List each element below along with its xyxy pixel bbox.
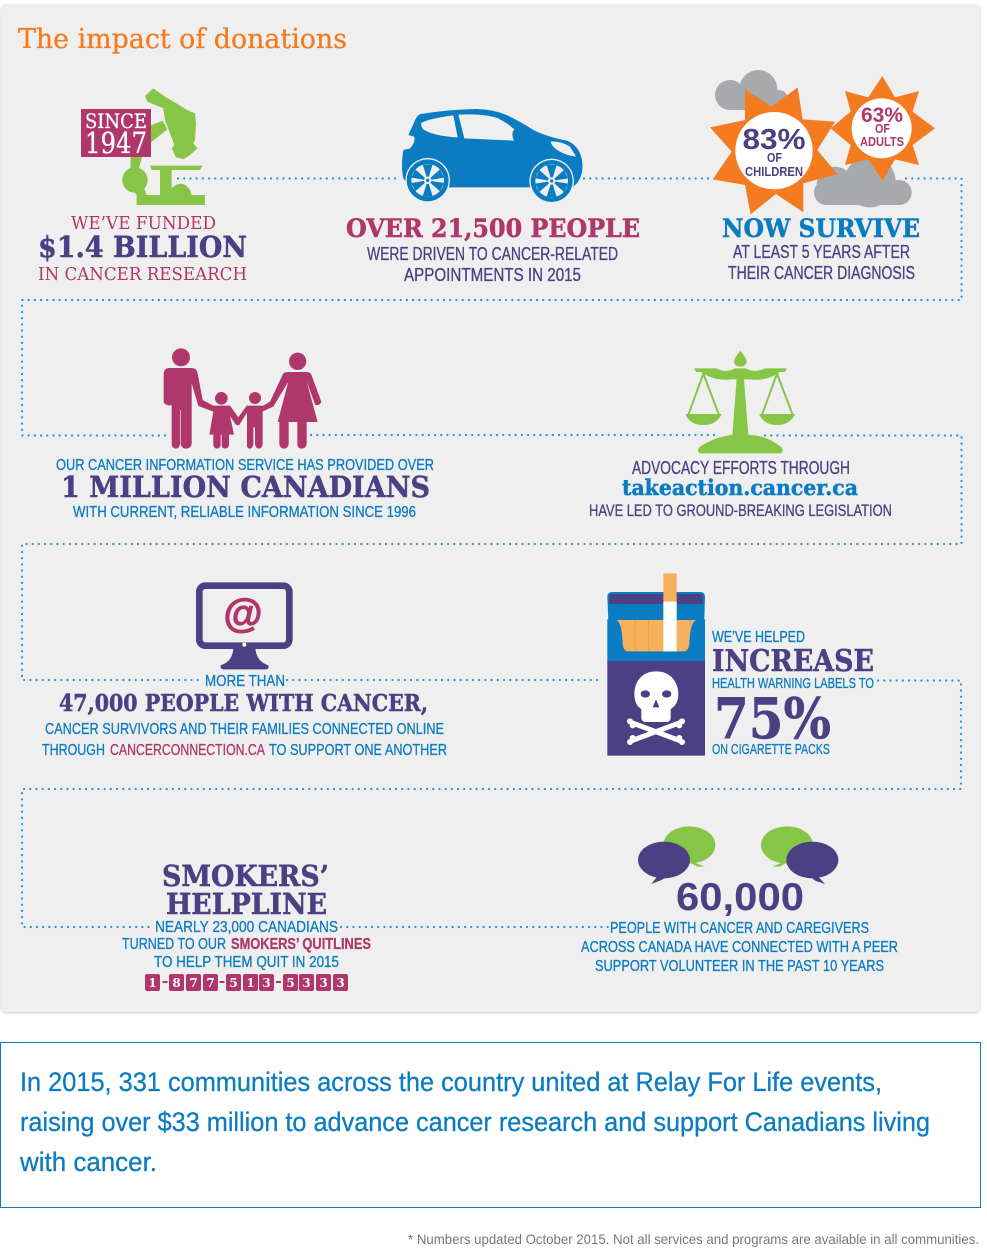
callout: Relay For Life	[0, 1042, 980, 1208]
text block: research funding: IN CANCER RESEARCH	[38, 264, 247, 285]
text block: peer support: SUPPORT VOLUNTEER IN THE PAST 10 YEARS	[595, 958, 884, 975]
text block: cancer connection: 47,000 PEOPLE WITH CANCER,	[59, 690, 428, 717]
icon: cigarette pack	[607, 573, 705, 756]
icon: clouds and suns	[710, 70, 935, 214]
text: 83% of children: CHILDREN	[745, 164, 803, 179]
text: 63% of adults: 63%	[861, 104, 903, 127]
text block: survival	[722, 214, 920, 283]
text block: warning labels: ON CIGARETTE PACKS	[712, 741, 830, 758]
text block: peer support: PEOPLE WITH CANCER AND CAREGIVERS	[610, 920, 869, 937]
text block: peer support	[581, 876, 898, 975]
text block: smokers' helpline: SMOKERS’ QUITLINES	[231, 936, 371, 953]
text block: survival: AT LEAST 5 YEARS AFTER	[733, 242, 910, 262]
text block: cancer connection: TO SUPPORT ONE ANOTHER	[269, 742, 447, 759]
text block: research funding	[38, 213, 247, 285]
phone number keys	[145, 974, 348, 991]
text block: cancer information service: 1 MILLION CANADIANS	[61, 470, 430, 504]
text block: smokers' helpline: SMOKERS’	[162, 859, 329, 893]
text block: advocacy: HAVE LED TO GROUND-BREAKING LEGISLATION	[589, 501, 892, 520]
panel: impact of donations	[1, 4, 980, 1012]
text block: warning labels	[712, 629, 874, 758]
text block: cancer information service: OUR CANCER INFORMATION SERVICE HAS PROVIDED OVER	[56, 457, 434, 474]
text block: peer support: 60,000	[676, 876, 804, 919]
callout: Relay For Life: with cancer.	[19, 1147, 157, 1177]
icon: microscope	[122, 88, 205, 205]
phone number keys: 3	[319, 976, 328, 990]
icon: computer monitor	[199, 586, 289, 669]
text block: rides	[346, 214, 640, 285]
phone number keys: 8	[172, 976, 181, 990]
icon: computer monitor: @	[223, 592, 262, 636]
text block: rides: OVER 21,500 PEOPLE	[346, 214, 640, 243]
text block: warning labels: HEALTH WARNING LABELS TO	[712, 675, 874, 692]
phone number keys: 1	[148, 976, 157, 990]
badge: since 1947	[81, 109, 151, 160]
text block: peer support: ACROSS CANADA HAVE CONNECTED WITH A PEER	[581, 939, 898, 956]
text block: cancer connection: CANCERCONNECTION.CA	[110, 742, 265, 759]
text block: warning labels: 75%	[714, 686, 831, 752]
text: 83% of children: OF	[767, 150, 782, 165]
icon: car	[402, 109, 583, 203]
text: 83% of children	[742, 124, 806, 179]
text block: warning labels: WE’VE HELPED	[712, 629, 805, 646]
phone number keys: 5	[286, 976, 295, 990]
callout: Relay For Life: raising over $33 million to advance cancer research and support Canadians living	[20, 1107, 930, 1137]
text block: survival: THEIR CANCER DIAGNOSIS	[728, 263, 915, 283]
text block: cancer connection: CANCER SURVIVORS AND THEIR FAMILIES CONNECTED ONLINE	[45, 721, 444, 738]
phone number keys: 3	[262, 976, 271, 990]
text block: cancer connection: THROUGH	[42, 742, 105, 759]
badge: since 1947: SINCE	[85, 109, 147, 133]
text block: smokers' helpline: HELPLINE	[166, 887, 327, 921]
text: 63% of adults: OF	[875, 121, 890, 136]
phone number keys: 5	[229, 976, 238, 990]
callout: Relay For Life: In 2015, 331 communities across the country united at Relay For Life events,	[20, 1067, 882, 1097]
title: The impact of donations	[18, 24, 347, 55]
text block: survival: NOW SURVIVE	[722, 214, 920, 243]
badge: since 1947: 1947	[85, 126, 147, 160]
text: 83% of children: 83%	[742, 124, 806, 156]
text block: smokers' helpline: TO HELP THEM QUIT IN 2015	[154, 954, 339, 971]
icon: scales	[685, 351, 795, 453]
connector: dotted path	[22, 178, 962, 927]
text block: advocacy	[589, 458, 892, 520]
text block: cancer information service	[56, 457, 434, 521]
phone number keys: 7	[189, 976, 198, 990]
text block: cancer connection	[42, 673, 447, 759]
icon: speech bubbles	[638, 826, 838, 884]
text block: advocacy: takeaction.cancer.ca	[622, 475, 858, 500]
phone number keys: 3	[336, 976, 345, 990]
phone number keys: 1	[246, 976, 255, 990]
text block: cancer information service: WITH CURRENT, RELIABLE INFORMATION SINCE 1996	[73, 504, 416, 521]
text block: research funding: WE’VE FUNDED	[71, 213, 216, 234]
phone number keys: 3	[302, 976, 311, 990]
phone number keys: 7	[206, 976, 215, 990]
text block: smokers' helpline: TURNED TO OUR	[122, 936, 226, 953]
text: 63% of adults	[860, 104, 904, 149]
text block: warning labels: INCREASE	[712, 644, 874, 679]
icon: family	[164, 348, 321, 449]
text block: rides: APPOINTMENTS IN 2015	[404, 265, 581, 285]
text block: cancer connection: MORE THAN	[205, 673, 285, 690]
text block: rides: WERE DRIVEN TO CANCER-RELATED	[367, 244, 618, 264]
text block: advocacy: ADVOCACY EFFORTS THROUGH	[632, 458, 850, 478]
text block: research funding: $1.4 BILLION	[38, 230, 247, 264]
text: 63% of adults: ADULTS	[860, 134, 904, 149]
text block: smokers' helpline: NEARLY 23,000 CANADIANS	[155, 919, 338, 936]
text block: smokers' helpline	[122, 859, 371, 971]
